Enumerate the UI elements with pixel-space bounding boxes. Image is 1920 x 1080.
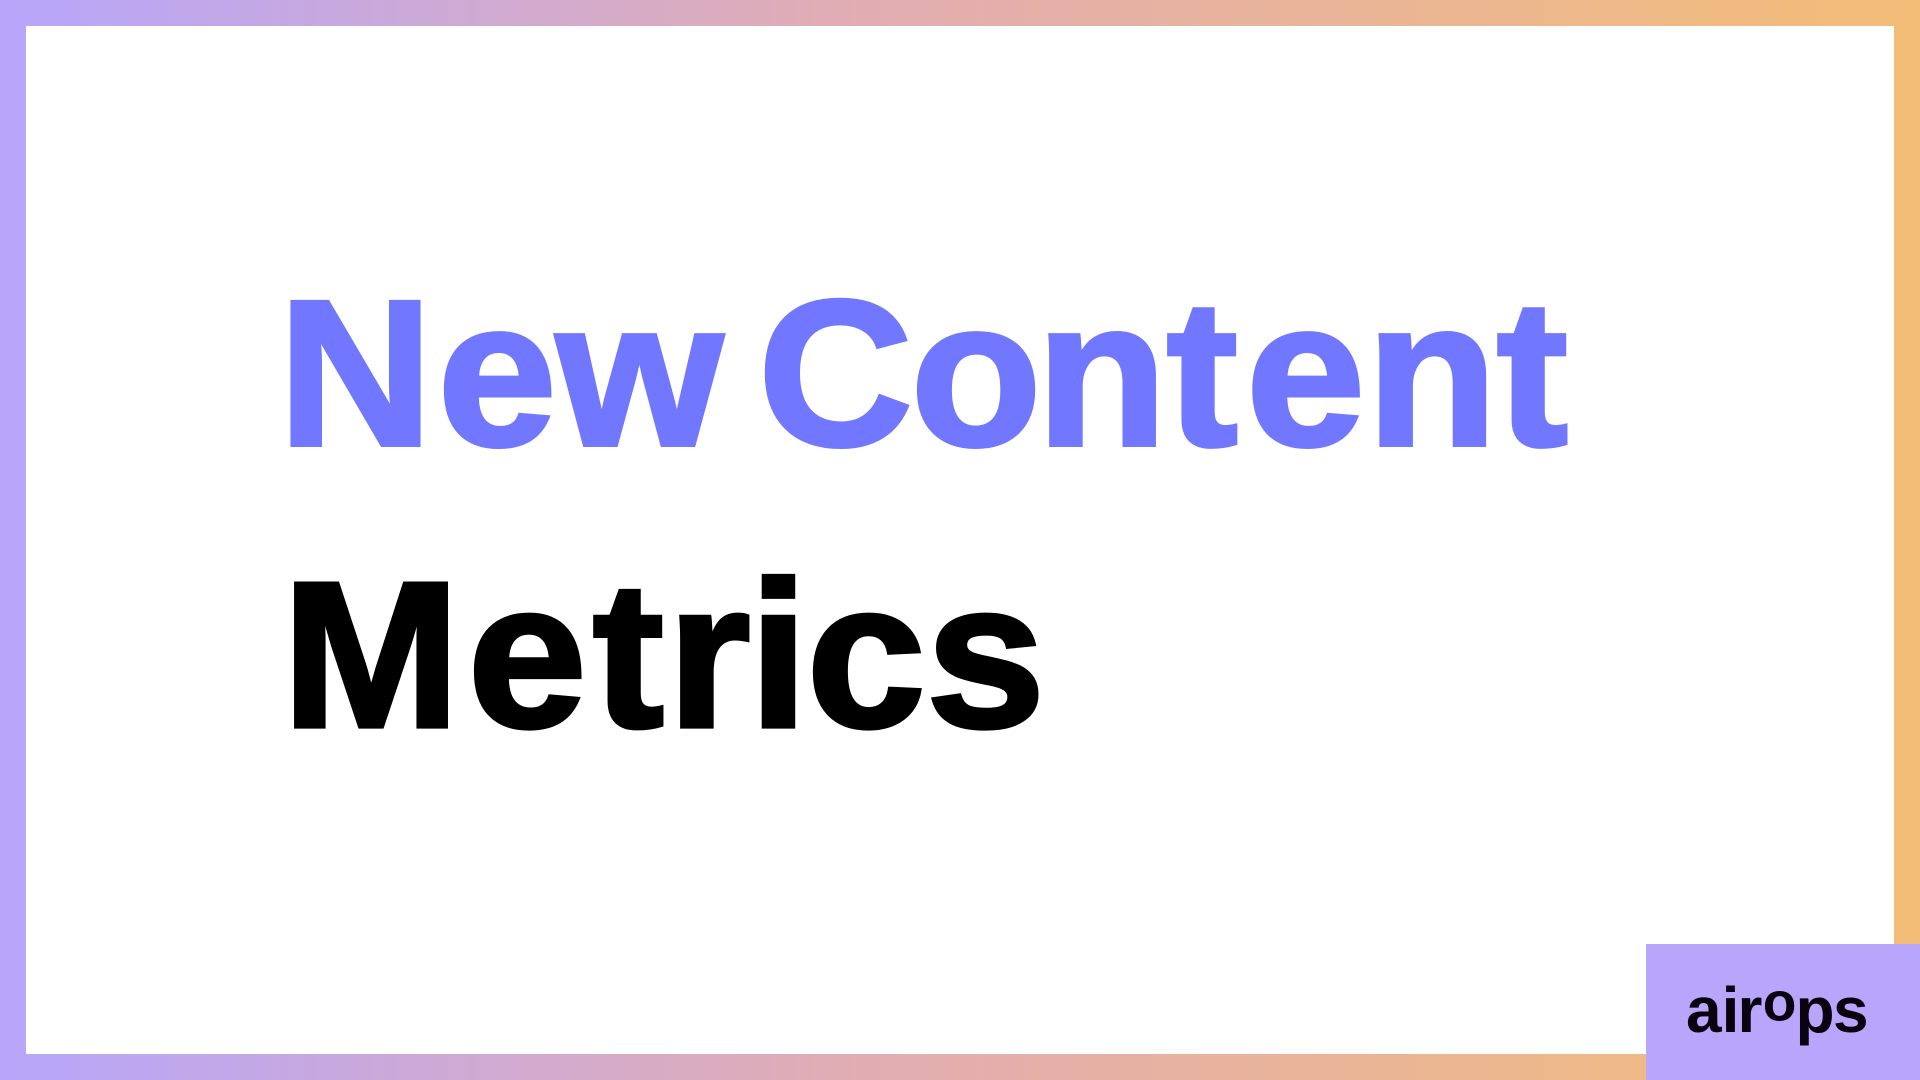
logo wordmark: airOps: s (1833, 974, 1869, 1046)
logo wordmark: airOps: i (1722, 974, 1739, 1046)
logo wordmark: airOps: a (1686, 974, 1722, 1046)
logo badge (1646, 944, 1920, 1080)
title (278, 257, 1568, 771)
title line: Metrics: Metrics (282, 538, 1045, 771)
logo wordmark: airOps: o (1763, 970, 1796, 1032)
logo wordmark: airOps: p (1796, 974, 1835, 1046)
logo wordmark: airOps: r (1738, 974, 1762, 1046)
title line: New Content: New Content (278, 257, 1568, 489)
